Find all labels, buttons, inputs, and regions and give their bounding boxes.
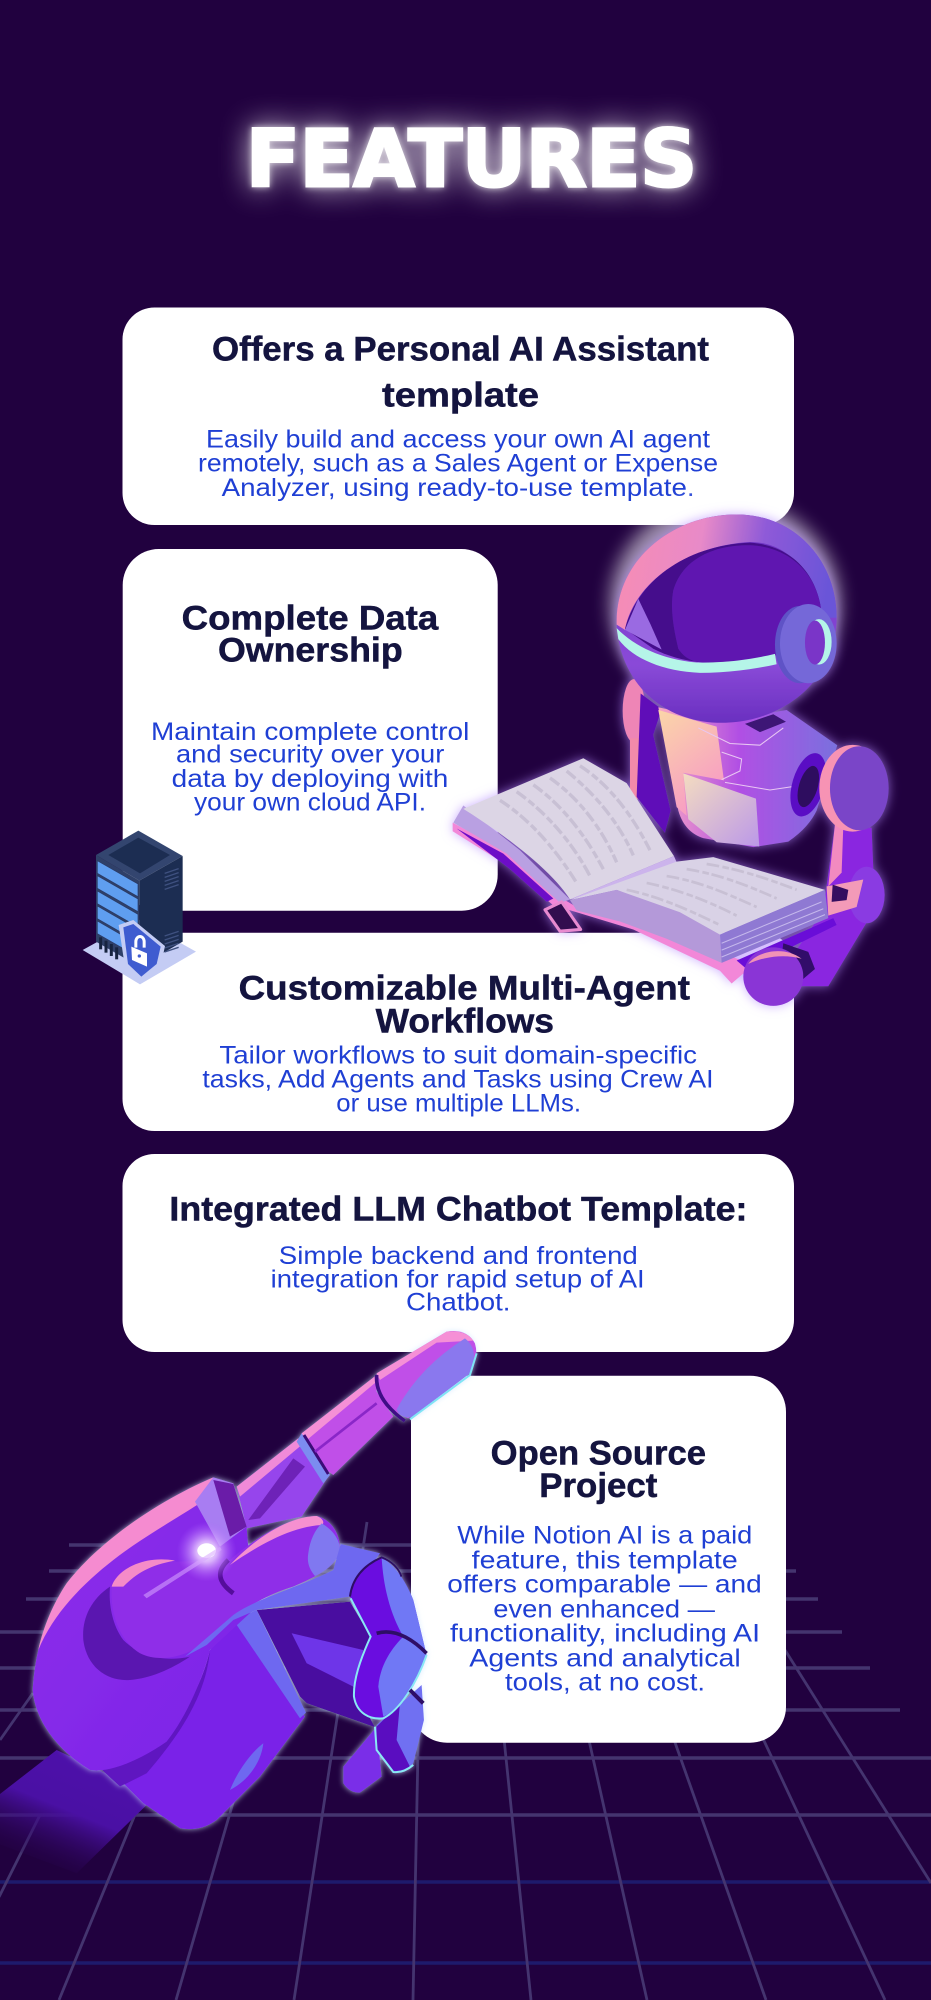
robot head: [617, 514, 837, 723]
body text: multi-agent workflows: tasks, Add Agents and Tasks using Crew AI: [202, 1066, 714, 1094]
wrist trail: [0, 1750, 147, 1873]
body text: open source project: offers comparable — and: [447, 1570, 762, 1598]
body text: personal AI assistant: remotely, such as a Sales Agent or Expense: [198, 450, 718, 478]
index finger: [237, 1331, 477, 1528]
body text: multi-agent workflows: or use multiple LLMs.: [336, 1090, 581, 1118]
shadowed palm interior: [257, 1602, 375, 1727]
heading: multi-agent workflows: [239, 969, 690, 1040]
thumb: [112, 1516, 340, 1658]
body text: open source project: While Notion AI is a paid: [457, 1521, 752, 1549]
robot torso: [658, 707, 837, 847]
panel: personal AI assistant template: [122, 308, 794, 525]
lens flare highlight: [143, 1522, 237, 1598]
panel: integrated LLM chatbot template: [122, 1154, 794, 1352]
body text: complete data ownership: and security over your: [176, 741, 444, 769]
panel: open source project: [411, 1376, 786, 1743]
body text: open source project: tools, at no cost.: [505, 1669, 705, 1697]
robot right arm: [783, 745, 889, 986]
panel: complete data ownership: [123, 549, 498, 911]
curled fingers: [343, 1557, 427, 1793]
heading: open source project: Open Source: [491, 1434, 706, 1472]
palm: [33, 1477, 253, 1770]
body text: open source project: even enhanced —: [493, 1595, 715, 1623]
icon: server rack with security shield: [83, 831, 196, 984]
heading: complete data ownership: Complete Data: [182, 599, 439, 637]
heading: open source project: [491, 1434, 706, 1505]
heading: complete data ownership: [182, 599, 439, 670]
folded finger strut: [292, 1633, 363, 1687]
body text: personal AI assistant: Analyzer, using ready-to-use template.: [222, 474, 695, 502]
body text: complete data ownership: Maintain complete control: [151, 718, 469, 746]
halo around head: [610, 497, 840, 711]
title: FEATURES: FEATURES: [246, 115, 697, 205]
body text: LLM chatbot: Simple backend and frontend: [279, 1242, 638, 1270]
illustration: robotic hand pointing: [0, 1331, 477, 1873]
title: FEATURES: FEATURES: [246, 115, 697, 205]
body text: LLM chatbot: Chatbot.: [406, 1289, 510, 1317]
body text: multi-agent workflows: Tailor workflows to suit domain-specific: [219, 1041, 697, 1069]
body text: personal AI assistant: [198, 426, 718, 502]
heading: personal AI assistant: Offers a Personal AI Assistant: [212, 331, 709, 369]
body text: open source project: functionality, including AI: [450, 1620, 760, 1648]
heading: personal AI assistant: template: [382, 377, 539, 415]
body text: LLM chatbot: [271, 1242, 645, 1317]
title: FEATURES: FEATURES: [246, 115, 697, 205]
body text: open source project: [447, 1521, 762, 1697]
heading: complete data ownership: Ownership: [218, 632, 403, 670]
perspective grid floor: [0, 1522, 931, 2000]
robot wheel: [743, 943, 815, 1006]
panel: customizable multi-agent workflows: [122, 933, 794, 1131]
robot ear sensor: [775, 604, 837, 683]
body text: multi-agent workflows: [202, 1041, 714, 1118]
body text: complete data ownership: your own cloud API.: [194, 789, 426, 817]
body text: personal AI assistant: Easily build and access your own AI agent: [206, 426, 710, 454]
body text: open source project: feature, this template: [472, 1546, 738, 1574]
illustration: robot reading a book: [453, 497, 889, 1006]
heading: multi-agent workflows: Workflows: [376, 1002, 554, 1040]
inner palm band: [185, 1544, 380, 1657]
body text: LLM chatbot: integration for rapid setup of AI: [271, 1265, 645, 1293]
book: [453, 758, 837, 984]
body text: open source project: Agents and analytical: [469, 1645, 741, 1673]
body text: complete data ownership: data by deploying with: [172, 765, 448, 793]
heading: personal AI assistant: [212, 331, 709, 415]
heading: open source project: Project: [539, 1467, 657, 1505]
body text: complete data ownership: [151, 718, 469, 817]
heading: multi-agent workflows: Customizable Multi-Agent: [239, 969, 690, 1007]
heading: LLM chatbot: Integrated LLM Chatbot Template:: [169, 1190, 747, 1228]
forearm: [100, 1610, 306, 1829]
robot back arm: [623, 679, 671, 833]
